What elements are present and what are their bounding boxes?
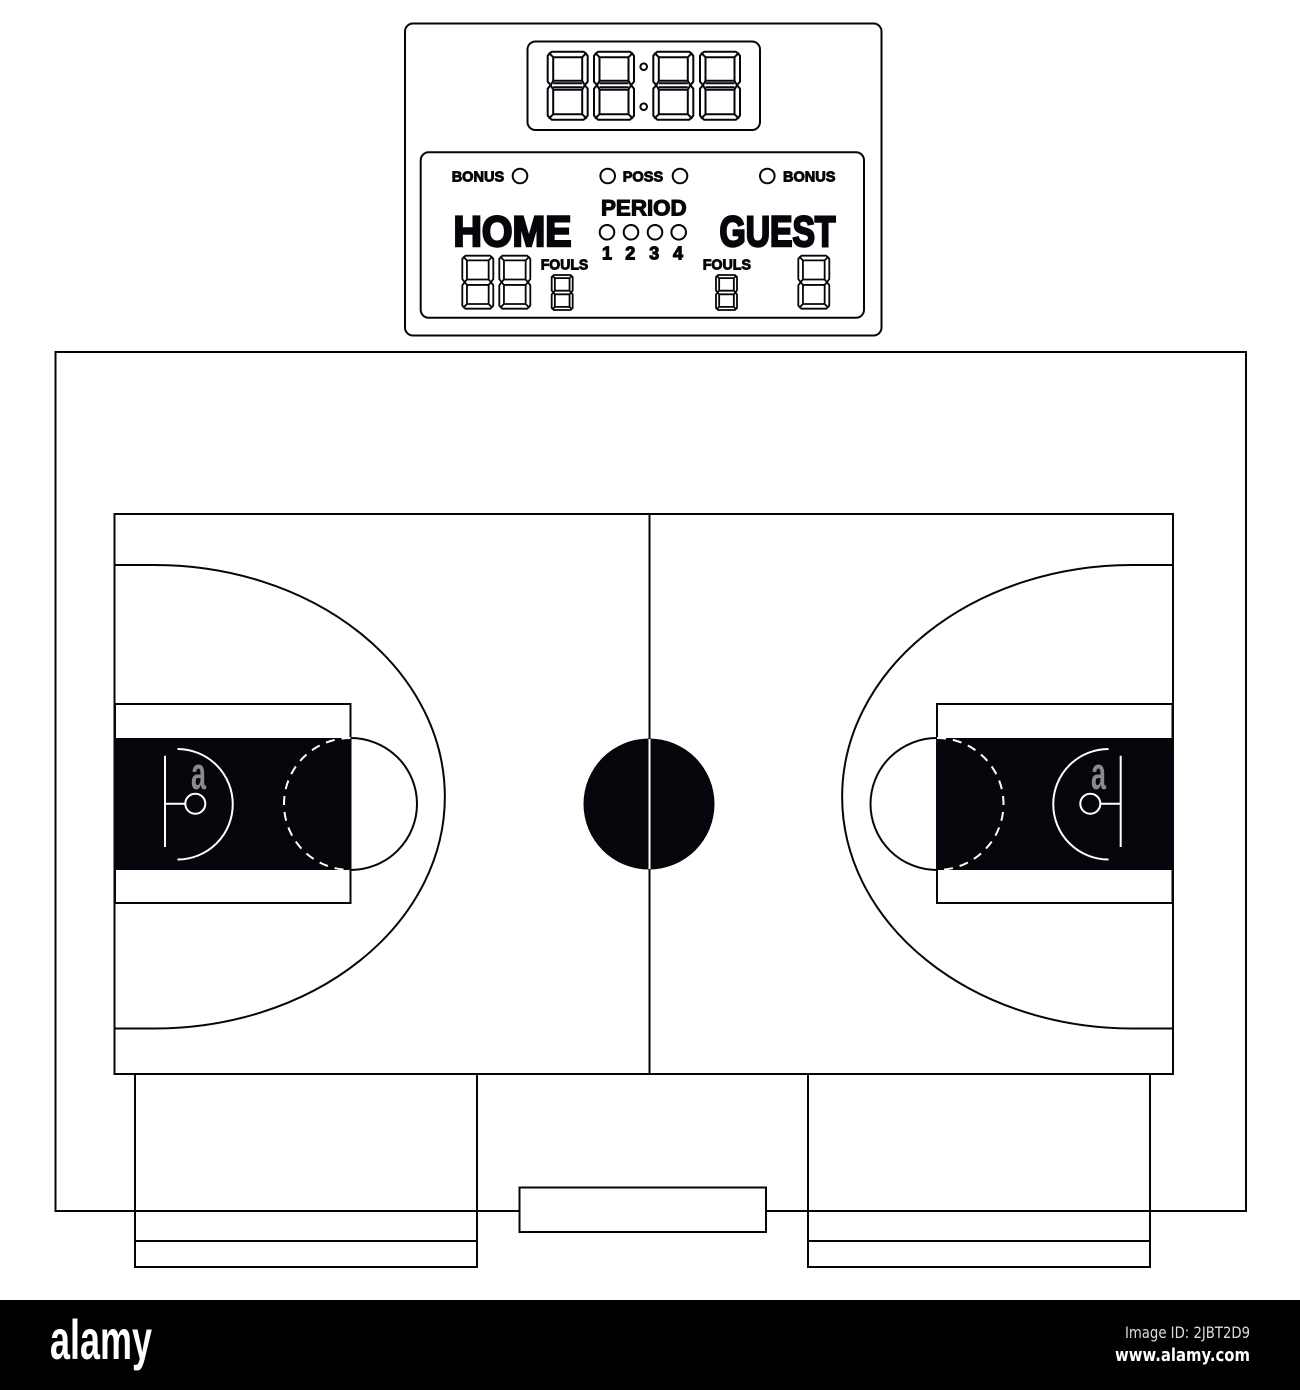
label: period: 4	[673, 244, 683, 264]
center circle	[584, 738, 714, 870]
panel: scoreboard	[405, 24, 882, 336]
panel: score display	[421, 152, 864, 318]
label: period	[600, 196, 687, 264]
label: possession	[600, 168, 687, 186]
label: period: 2	[625, 244, 635, 264]
label: guest bonus	[760, 168, 836, 186]
right key	[871, 704, 1172, 903]
watermark: right a: a	[1091, 748, 1107, 799]
home fouls: FOULS	[541, 256, 588, 274]
scorer's table	[520, 1188, 766, 1232]
image id: Image ID: 2JBT2D9	[1125, 1323, 1250, 1342]
home score digits	[462, 256, 530, 309]
label: period: PERIOD	[601, 196, 687, 220]
label: guest bonus: BONUS	[783, 168, 836, 186]
footer bar	[0, 1300, 1300, 1390]
panel: arena floor outline	[56, 352, 1246, 1211]
watermark: left a: a	[191, 748, 207, 799]
heading: guest: GUEST	[720, 208, 836, 256]
heading: home: HOME	[454, 208, 572, 256]
left bench	[135, 1074, 477, 1267]
left three-point arc	[115, 565, 445, 1028]
label: possession: POSS	[623, 168, 663, 186]
right bench	[808, 1074, 1150, 1267]
label: home bonus: BONUS	[452, 168, 504, 186]
guest score digit	[798, 256, 829, 309]
panel: court	[114, 514, 1173, 1074]
panel: game clock	[528, 42, 760, 130]
footer logo: alamy	[50, 1308, 152, 1371]
right hoop and backboard	[1053, 749, 1121, 860]
right three-point arc	[842, 565, 1172, 1028]
guest fouls	[703, 256, 751, 310]
left hoop and backboard	[165, 749, 233, 860]
home fouls	[541, 256, 588, 310]
label: period: 1	[602, 244, 612, 264]
left key	[115, 704, 417, 903]
website: www.alamy.com	[1115, 1345, 1250, 1366]
guest fouls: FOULS	[703, 256, 751, 274]
label: period: 3	[649, 244, 659, 264]
center line	[648, 514, 650, 1074]
